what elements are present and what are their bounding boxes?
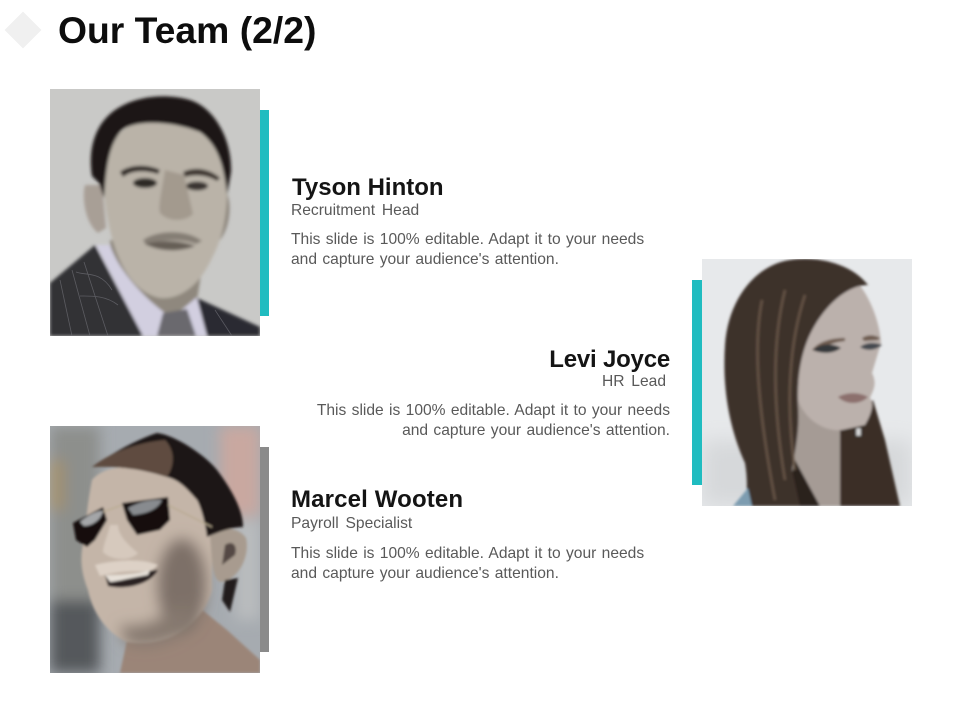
- description: Tyson Hinton: This slide is 100% editable. Adapt it to your needs: [291, 231, 644, 248]
- description: Levi Joyce: [317, 402, 670, 439]
- name: Levi Joyce: Levi Joyce: [549, 346, 670, 373]
- accent bar: Levi Joyce: [692, 280, 702, 485]
- name: Marcel Wooten: Marcel Wooten: [291, 486, 463, 513]
- photo: Tyson Hinton: [50, 89, 260, 336]
- description: Levi Joyce: and capture your audience's attention.: [402, 422, 670, 439]
- description: Tyson Hinton: [291, 231, 644, 268]
- description: Marcel Wooten: and capture your audience's attention.: [291, 565, 559, 582]
- description: Marcel Wooten: [291, 545, 644, 582]
- photo: Levi Joyce: [702, 259, 912, 506]
- name: Tyson Hinton: Tyson Hinton: [292, 174, 444, 201]
- role: HR Lead: HR Lead: [602, 373, 666, 390]
- description: Levi Joyce: This slide is 100% editable. Adapt it to your needs: [317, 402, 670, 419]
- accent bar: Marcel Wooten: [260, 447, 269, 652]
- accent bar: Tyson Hinton: [260, 110, 269, 316]
- icon: title diamond: [5, 12, 41, 48]
- photo: Marcel Wooten: [50, 426, 260, 673]
- description: Tyson Hinton: and capture your audience's attention.: [291, 251, 559, 268]
- role: Recruitment Head: Recruitment Head: [291, 202, 419, 219]
- role: Payroll Specialist: Payroll Specialist: [291, 515, 412, 532]
- title: Our Team (2/2): [58, 9, 316, 51]
- description: Marcel Wooten: This slide is 100% editable. Adapt it to your needs: [291, 545, 644, 562]
